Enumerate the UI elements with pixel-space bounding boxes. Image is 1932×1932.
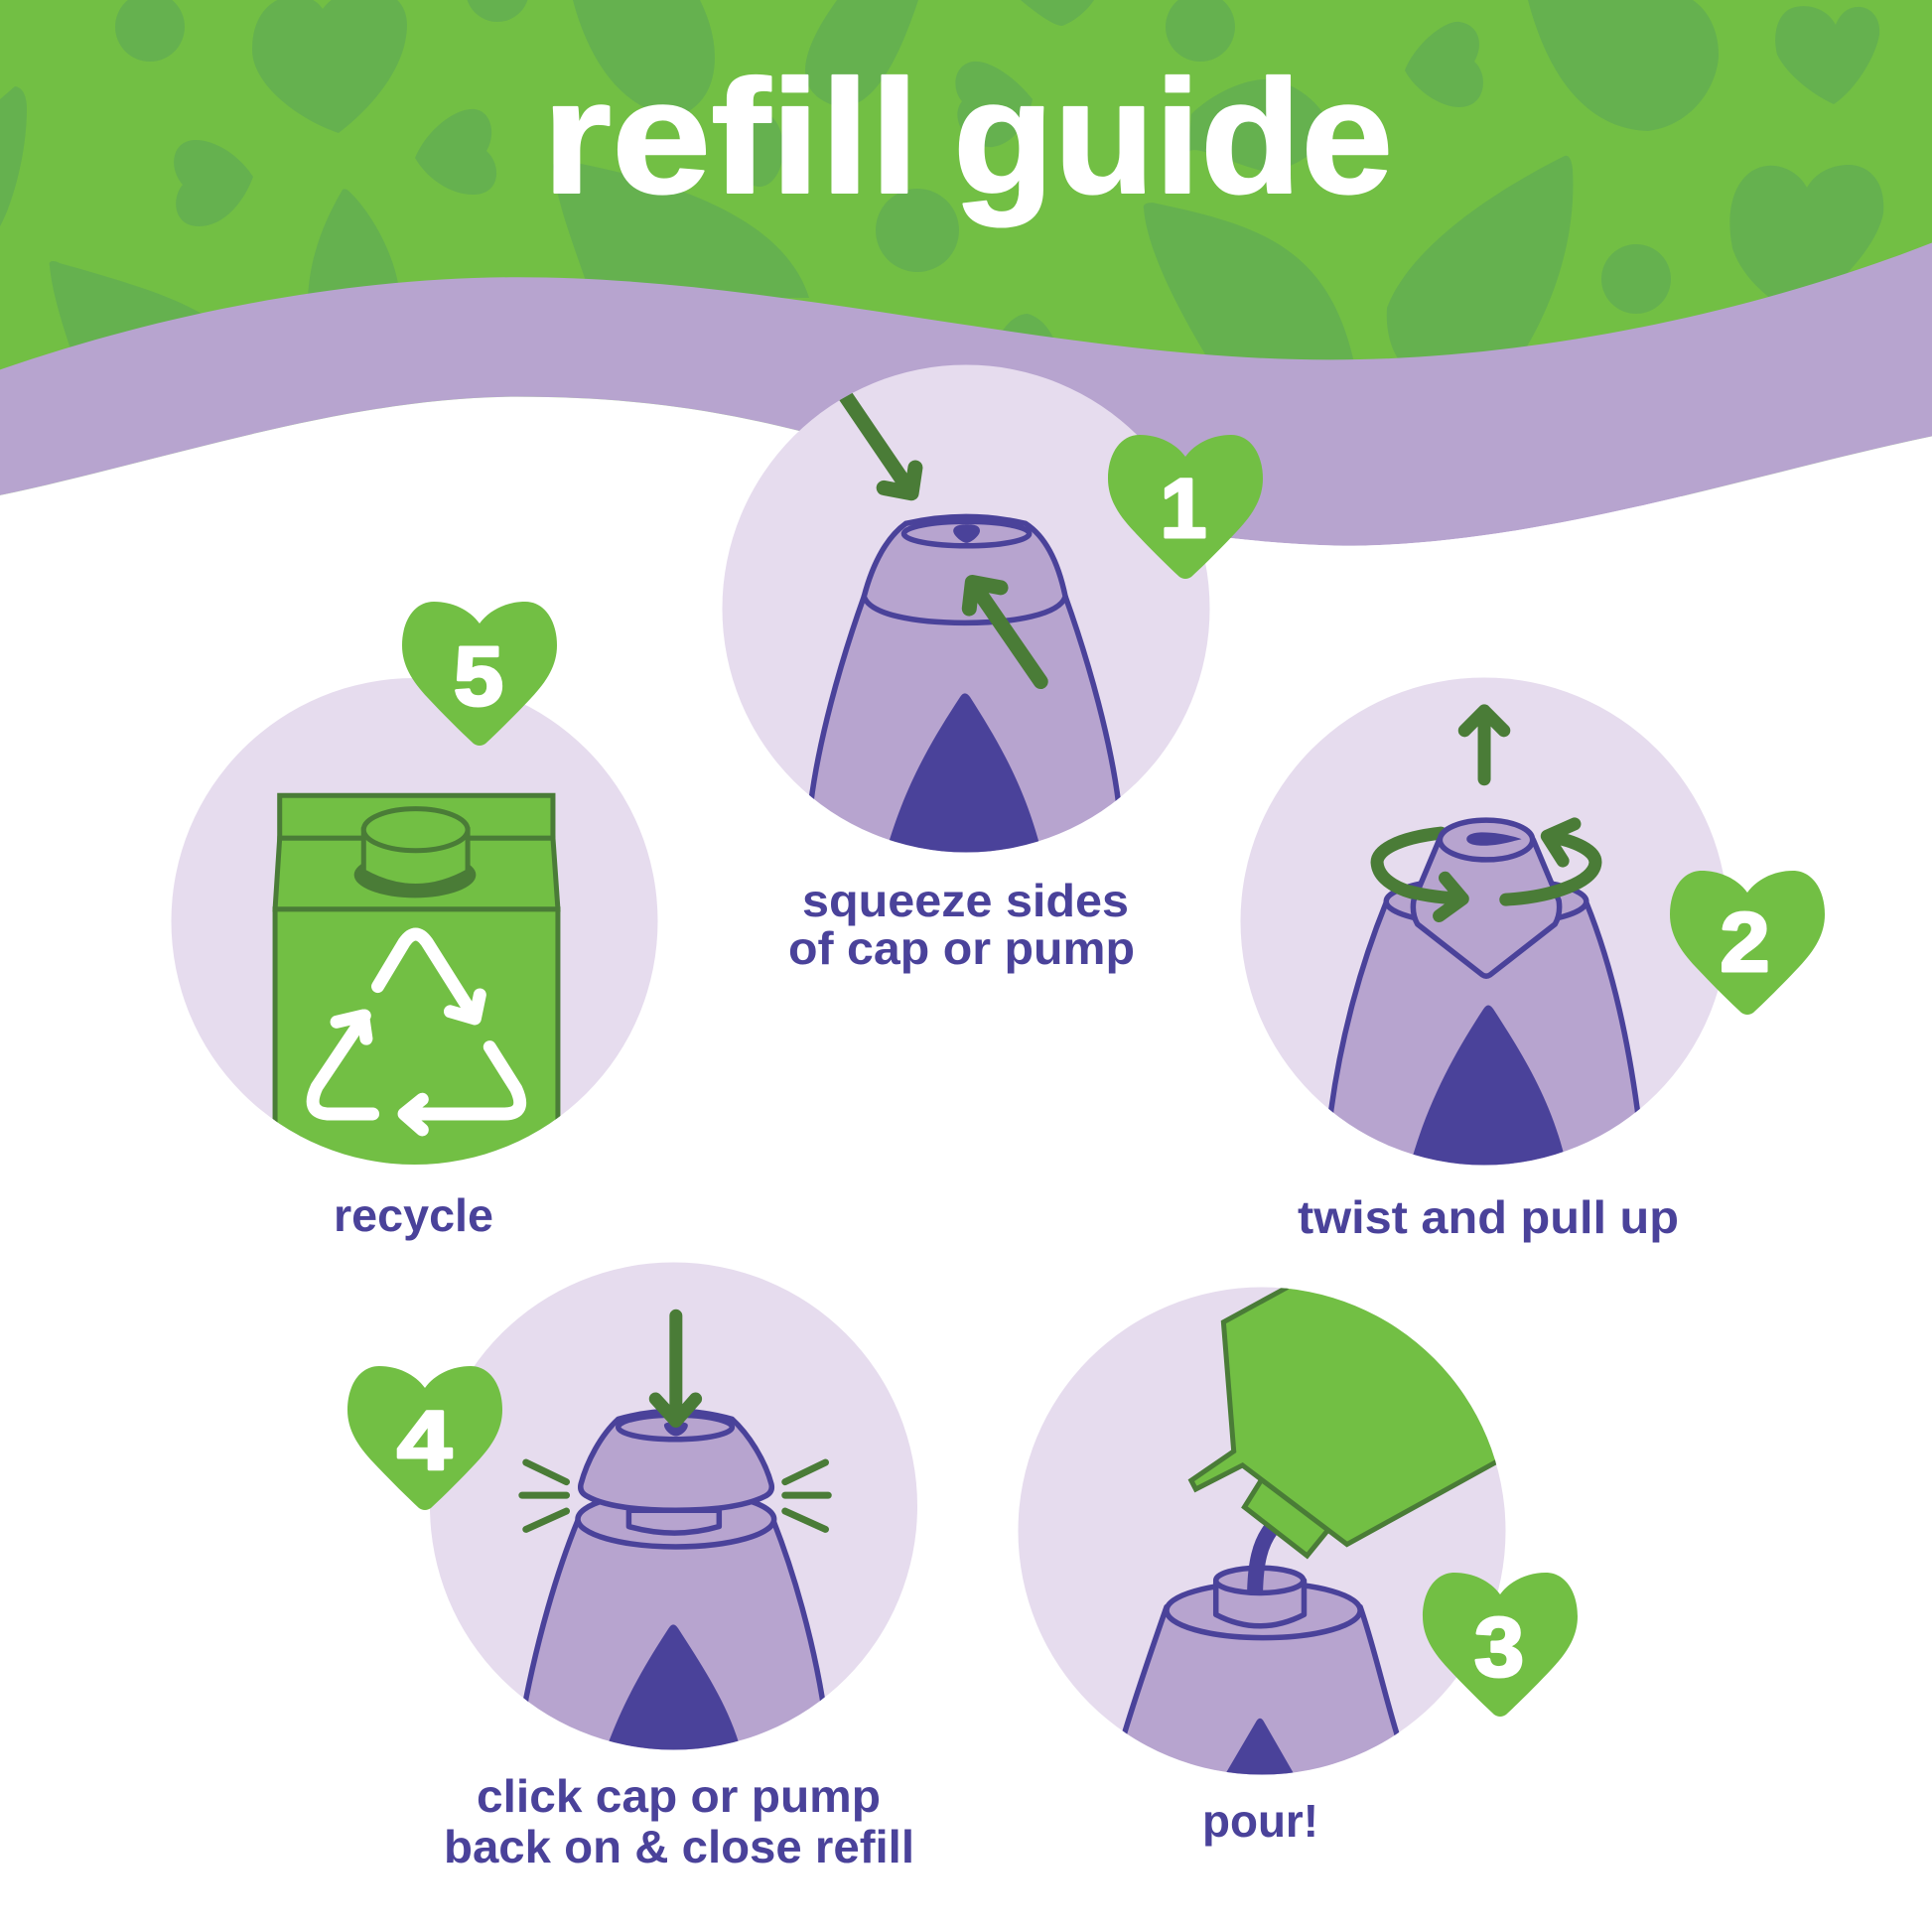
illustration: bottle with squeeze arrows — [809, 393, 1121, 852]
title — [542, 46, 1393, 227]
heart badge 5: 5 — [454, 629, 503, 723]
background leaf and heart pattern — [0, 0, 1883, 367]
title: guide — [953, 46, 1393, 227]
panel: step 2 twist — [1241, 677, 1727, 1197]
panel: step 4 click — [430, 1263, 917, 1749]
heart badge 1 — [1108, 435, 1263, 579]
label: click cap or pump back on and close refill: back on & close refill — [444, 1821, 914, 1872]
heart badge 4 — [347, 1366, 502, 1510]
label: recycle: recycle — [334, 1189, 493, 1241]
panel: step 3 pour — [1019, 1287, 1505, 1775]
heart badge 2: 2 — [1720, 896, 1769, 989]
label: squeeze sides of cap or pump: squeeze sides — [802, 875, 1129, 926]
panel: step 1 squeeze — [723, 365, 1209, 852]
label: pour!: pour! — [1202, 1795, 1318, 1847]
heart badge 3 — [1423, 1573, 1578, 1717]
illustration: pouch pouring into bottle — [1122, 1288, 1497, 1775]
label: click cap or pump back on and close refill: click cap or pump — [477, 1770, 881, 1822]
panel: step 5 recycle — [171, 678, 657, 1165]
heart badge 1: 1 — [1161, 462, 1206, 555]
heart badge 5 — [402, 602, 557, 746]
title: refill — [542, 46, 919, 227]
label: click cap or pump back on and close refill — [444, 1770, 914, 1872]
label: squeeze sides of cap or pump: of cap or pump — [788, 922, 1135, 974]
illustration: carton with recycle symbol — [272, 792, 561, 1165]
heart badge 3: 3 — [1474, 1600, 1524, 1694]
illustration: bottle with twist arrows — [1321, 711, 1647, 1197]
heart badge 2 — [1670, 871, 1825, 1015]
label: squeeze sides of cap or pump — [788, 875, 1135, 974]
header: green band with pattern — [0, 0, 1932, 496]
illustration: bottle with click arrow — [518, 1309, 832, 1749]
label: twist and pull up: twist and pull up — [1298, 1191, 1679, 1243]
heart badge 4: 4 — [397, 1394, 452, 1487]
